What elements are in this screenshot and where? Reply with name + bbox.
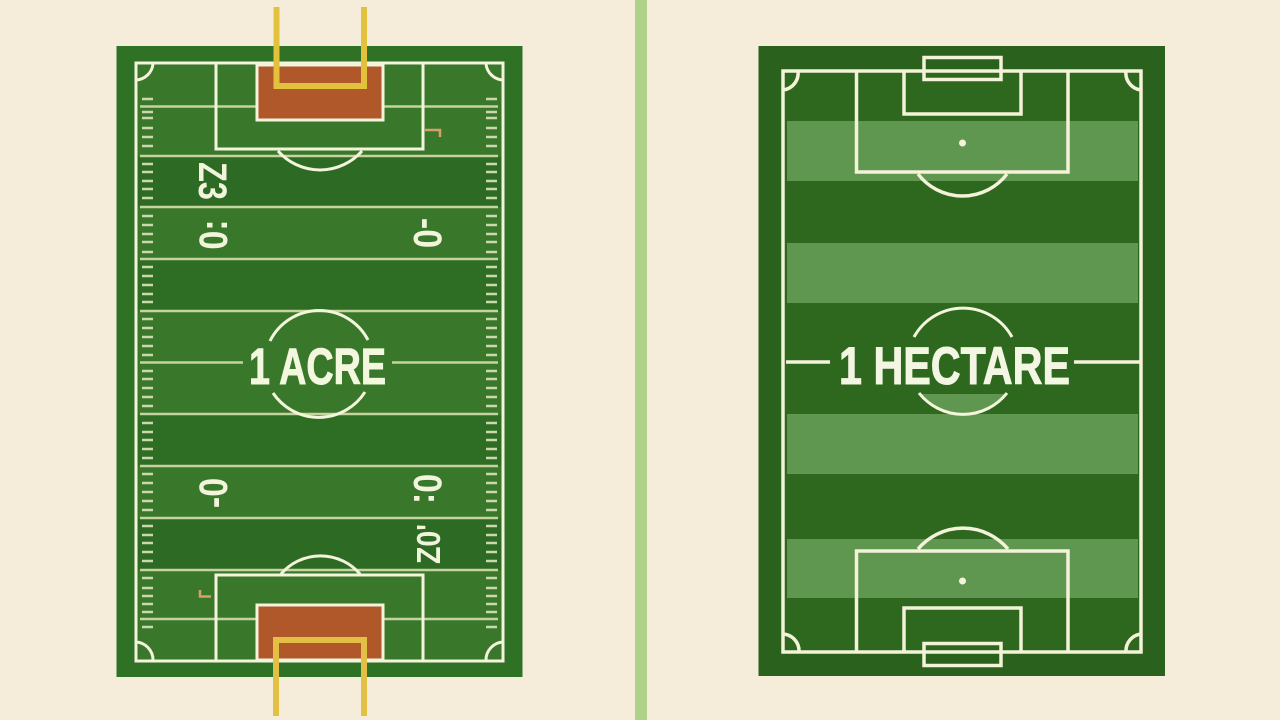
center circle xyxy=(914,308,1012,414)
yard number: upper left: 0: xyxy=(190,219,236,250)
center circle lower segment xyxy=(919,394,1007,415)
yard number: bottom right: Z0' xyxy=(410,524,447,564)
center divider xyxy=(635,0,647,720)
yard number: top left: Z3 xyxy=(190,162,234,200)
panel: 1 hectare soccer pitch xyxy=(758,46,1165,676)
top end zone xyxy=(257,65,383,120)
orange marker bottom xyxy=(200,590,211,596)
pitch surface xyxy=(758,46,1165,676)
orange marker top xyxy=(425,130,440,137)
mown stripes xyxy=(787,121,1138,598)
bottom penalty spot xyxy=(959,578,966,584)
label: 1 hectare: 1 HECTARE xyxy=(839,337,1070,396)
label: 1 acre: 1 ACRE xyxy=(249,338,386,395)
field surface xyxy=(116,46,522,677)
yard number: lower right: 0: xyxy=(405,474,451,504)
field boundary and boxes xyxy=(136,63,503,661)
top penalty spot xyxy=(959,140,966,146)
bottom goal post xyxy=(276,640,364,716)
yard number: lower left: -0 xyxy=(190,478,236,508)
yard lines xyxy=(140,106,498,619)
top goal post xyxy=(276,7,364,86)
hash marks xyxy=(142,99,497,627)
center circle xyxy=(270,310,368,417)
bottom end zone xyxy=(257,605,383,660)
yard number: upper right: -0 xyxy=(405,218,451,248)
panel: 1 acre football field xyxy=(116,7,522,716)
pitch markings xyxy=(783,58,1141,666)
